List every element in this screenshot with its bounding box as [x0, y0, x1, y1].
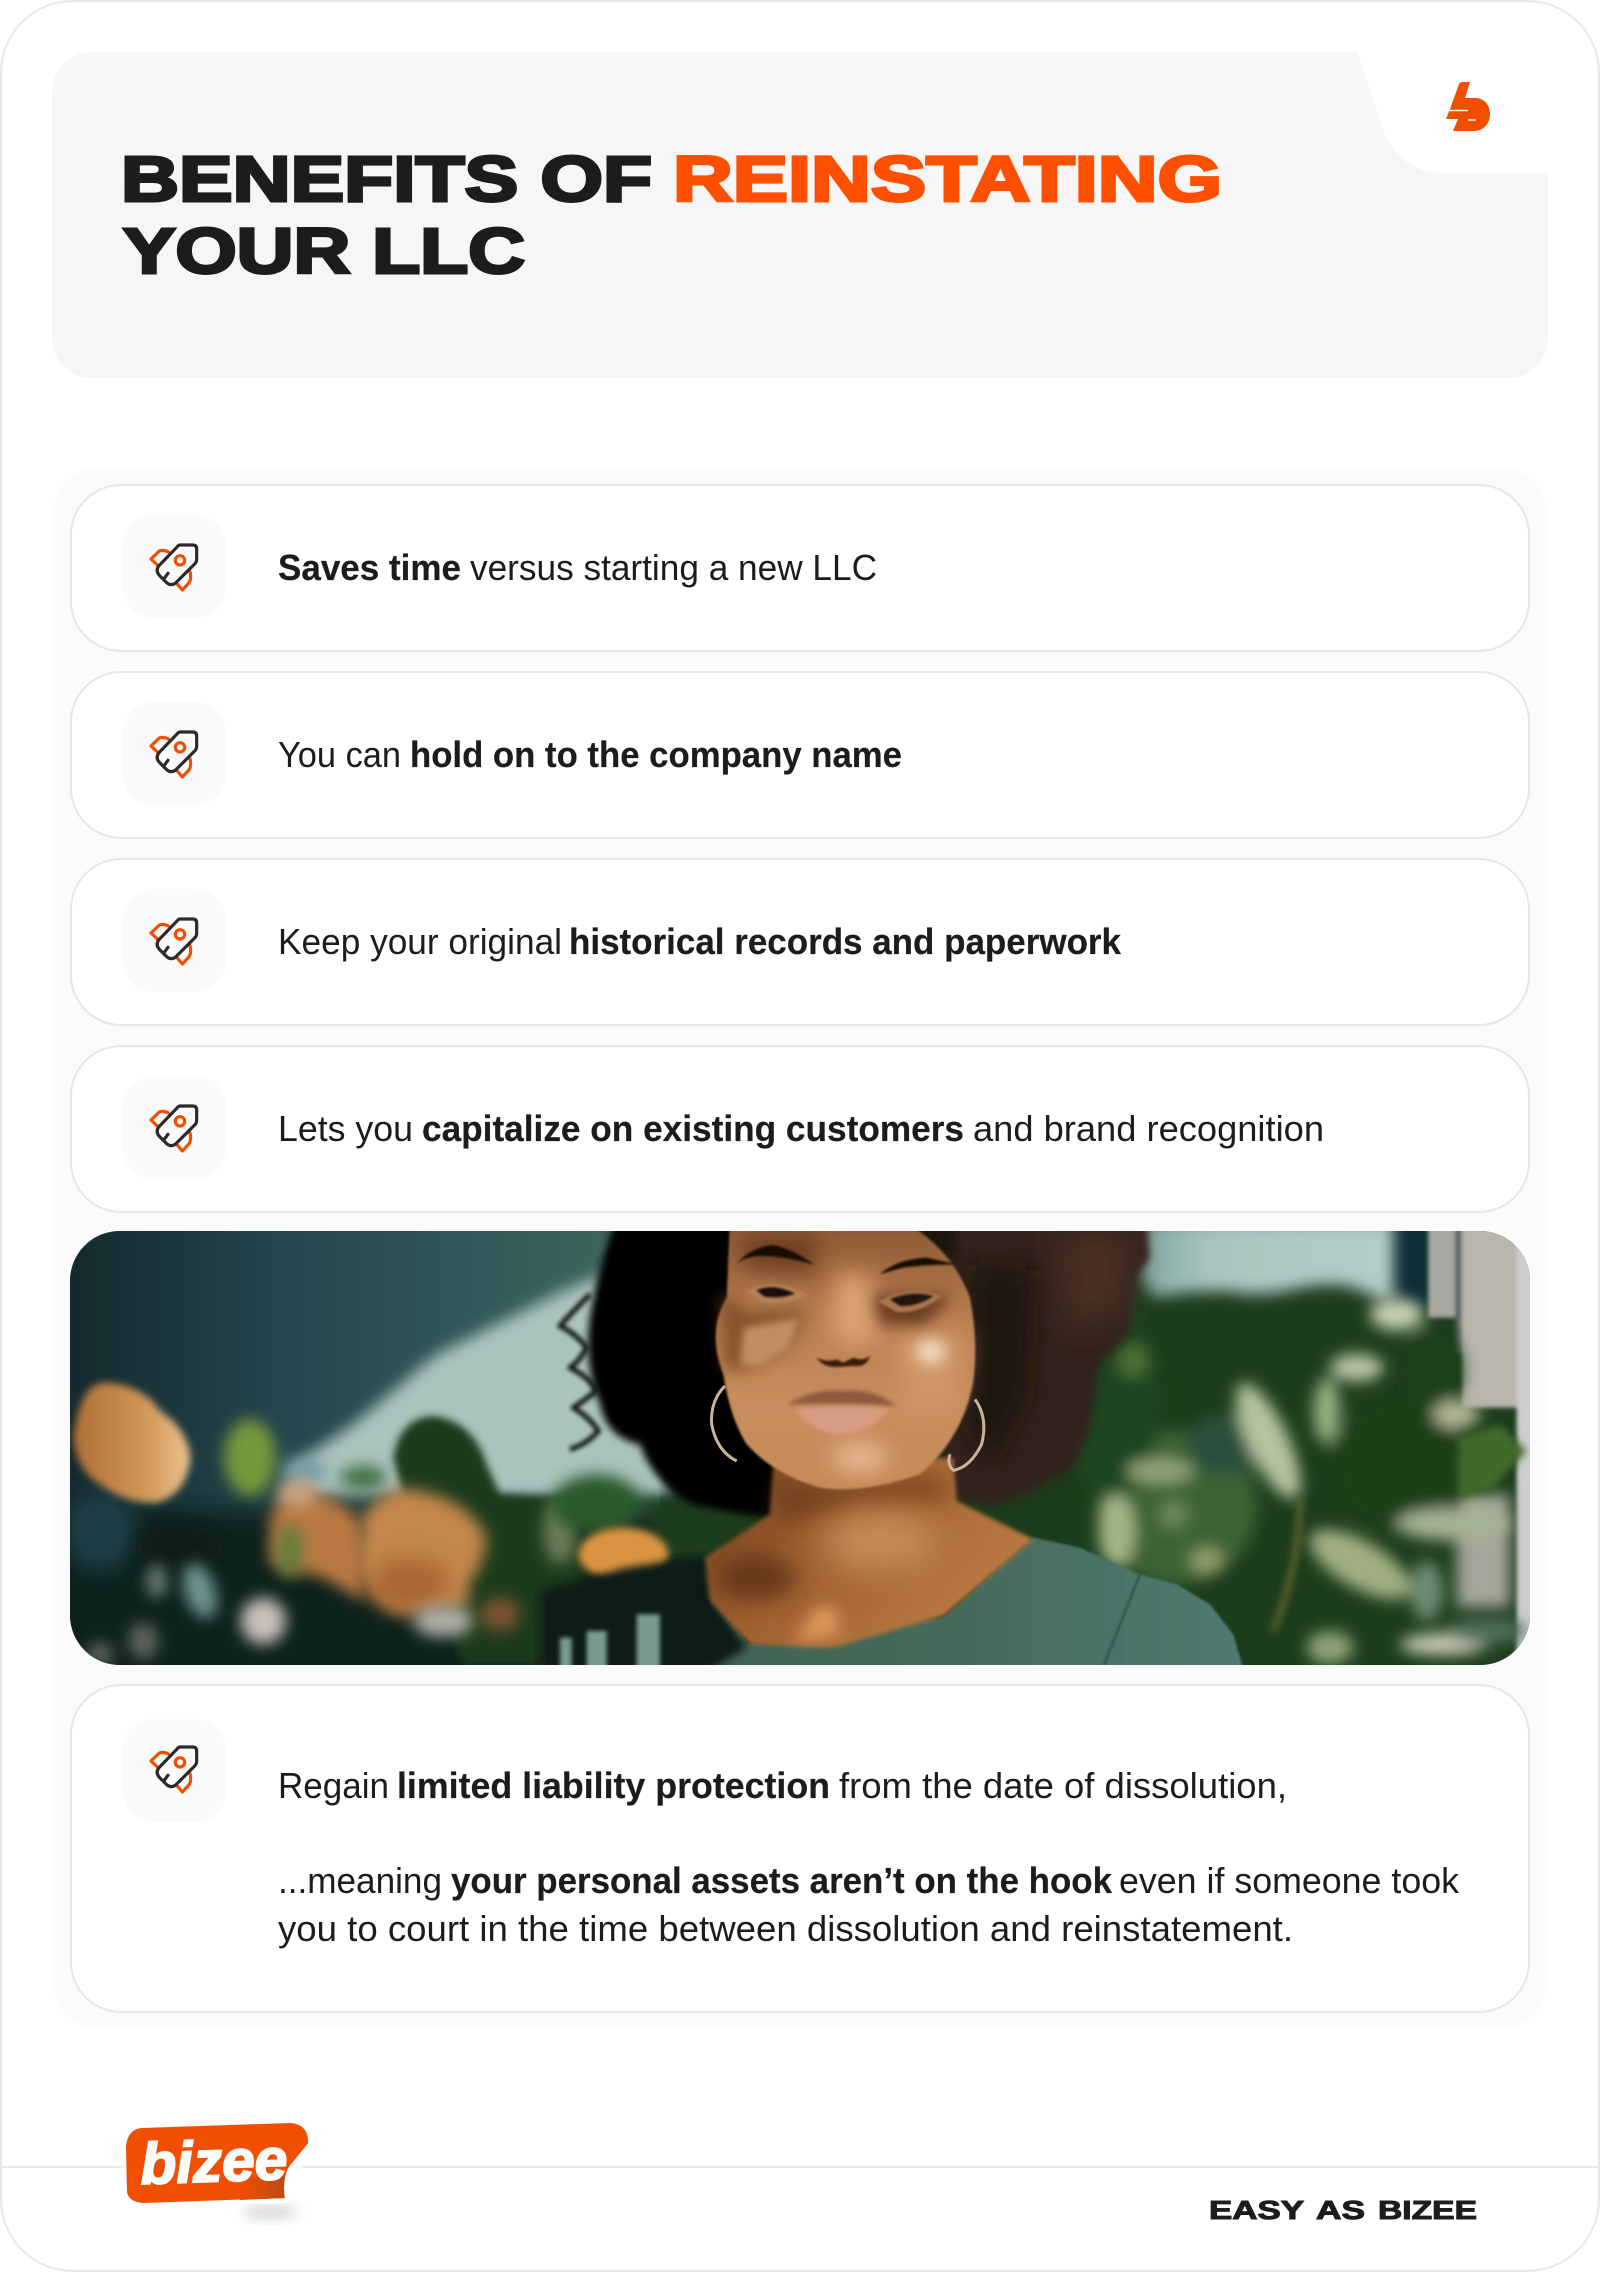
stem [1273, 1498, 1300, 1631]
earrings [711, 1386, 984, 1470]
tagline [1209, 2195, 1477, 2225]
text: versus starting a new LLC [470, 547, 877, 588]
window frame [1425, 1231, 1530, 1652]
header background with corner notch [52, 52, 1548, 378]
right background: plants and window frame [920, 1221, 1553, 1714]
title [121, 143, 1222, 287]
title: BENEFITS OF [121, 143, 652, 215]
text: hold on to the company name [410, 734, 902, 775]
text: limited liability protection [397, 1765, 830, 1806]
text: historical records and paperwork [569, 921, 1122, 962]
eyebrows [737, 1245, 813, 1264]
photo: smiling woman among plants [70, 1231, 1530, 1665]
foliage [1060, 1298, 1527, 1664]
text [278, 1108, 1324, 1149]
card: saves time [71, 485, 1529, 651]
face [716, 1218, 975, 1489]
icon: rocket [123, 889, 226, 992]
shirt [537, 1538, 1244, 1671]
icon: bizee bolt mark [1446, 82, 1490, 131]
text: capitalize on existing customers [422, 1108, 964, 1149]
logo peel [284, 2142, 309, 2202]
text: You can [278, 734, 401, 775]
title: REINSTATING [673, 143, 1222, 215]
eyes [747, 1284, 808, 1303]
left background: wall and flowers [70, 1231, 676, 1665]
icon: rocket [123, 1076, 226, 1179]
text: ...meaning [278, 1860, 442, 1901]
hair curls [560, 1294, 598, 1449]
hair [588, 1218, 793, 1518]
cheek highlight [916, 1339, 946, 1364]
tagline: AS [1316, 2195, 1365, 2225]
card: limited liability [71, 1685, 1529, 2012]
tagline: EASY [1209, 2195, 1304, 2225]
title: YOUR LLC [123, 215, 525, 287]
text: you to court in the time between dissolution and reinstatement. [278, 1908, 1293, 1949]
card: existing customers [71, 1046, 1529, 1212]
card: historical records [71, 859, 1529, 1025]
logo wordmark: bizee [139, 2127, 288, 2197]
card: company name [71, 672, 1529, 838]
text: your personal assets aren’t on the hook [451, 1860, 1113, 1901]
panel: benefits list [27, 467, 1553, 2029]
tagline: BIZEE [1378, 2195, 1477, 2225]
center background patch [552, 1474, 773, 1581]
list background [52, 467, 1548, 2029]
text: and brand recognition [973, 1108, 1324, 1149]
text: Saves time [278, 547, 461, 588]
text: Lets you [278, 1108, 413, 1149]
text [278, 1765, 1460, 1949]
shaded brow and cheek [720, 1291, 807, 1371]
footer rule [2, 2166, 1598, 2168]
portrait drawn in 3x local coordinates [537, 1218, 1244, 1674]
lips [787, 1390, 897, 1406]
bright leaf [1458, 1424, 1527, 1498]
footer [2, 2119, 1598, 2225]
icon: rocket [123, 1719, 226, 1822]
nose [817, 1356, 870, 1367]
text: even if someone took [1119, 1860, 1460, 1901]
text [278, 921, 1122, 962]
shirt highlights [560, 1614, 660, 1671]
text: Regain [278, 1765, 389, 1806]
text: from the date of dissolution, [839, 1765, 1287, 1806]
header panel [52, 52, 1548, 378]
logo: bizee sticker [122, 2119, 312, 2220]
text [278, 547, 877, 588]
text: Keep your original [278, 921, 562, 962]
icon: rocket [123, 702, 226, 805]
icon: rocket [123, 515, 226, 618]
neck and chest [705, 1458, 1033, 1648]
